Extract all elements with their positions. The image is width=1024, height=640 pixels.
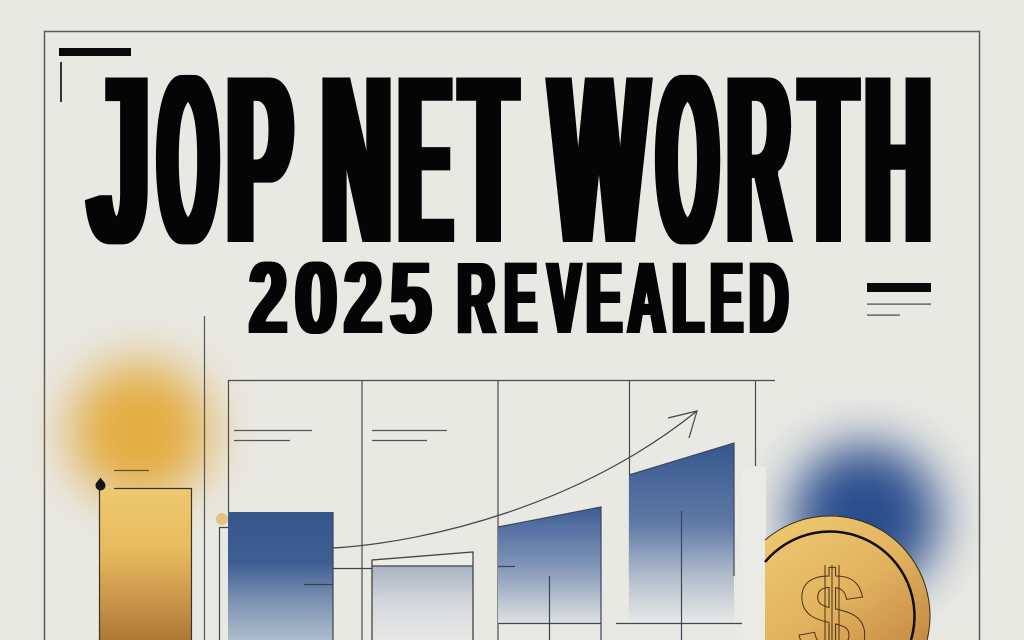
axis line	[204, 316, 206, 640]
icon: ink drop	[96, 478, 106, 490]
title: R	[728, 22, 790, 296]
bar 4	[616, 443, 745, 640]
title: E	[399, 22, 451, 296]
arrow: growth trend	[333, 411, 697, 548]
subtitle	[249, 241, 788, 355]
legend lines: column 2	[372, 430, 447, 440]
subtitle: E	[586, 241, 622, 355]
legend lines: column 1	[234, 430, 312, 440]
subtitle: V	[548, 241, 580, 355]
chart edge mask	[742, 467, 766, 640]
subtitle: E	[504, 241, 537, 355]
chart grid	[228, 380, 775, 640]
accent: right lines	[867, 283, 931, 316]
title: P	[227, 22, 290, 296]
subtitle: 0	[295, 241, 337, 355]
subtitle: E	[710, 241, 743, 355]
title: W	[551, 22, 647, 296]
title	[89, 22, 931, 296]
bar 1	[216, 512, 372, 640]
bar 2	[372, 552, 473, 640]
glow: blue	[791, 444, 939, 592]
title: T	[461, 22, 516, 296]
subtitle: L	[672, 241, 703, 355]
icon: gold coin	[765, 516, 930, 640]
subtitle: A	[628, 241, 665, 355]
title: O	[159, 22, 217, 296]
subtitle: 2	[344, 241, 382, 355]
bar 3	[498, 507, 601, 640]
accent: top-left bars	[59, 48, 131, 102]
subtitle: R	[457, 241, 495, 355]
title: T	[801, 22, 856, 296]
glow: gold	[70, 362, 210, 502]
title: J	[89, 22, 149, 296]
subtitle: D	[749, 241, 788, 355]
subtitle: 2	[249, 241, 287, 355]
subtitle: 5	[390, 241, 431, 355]
title: O	[658, 22, 718, 296]
bar: gold	[100, 470, 192, 640]
title: N	[322, 22, 391, 296]
